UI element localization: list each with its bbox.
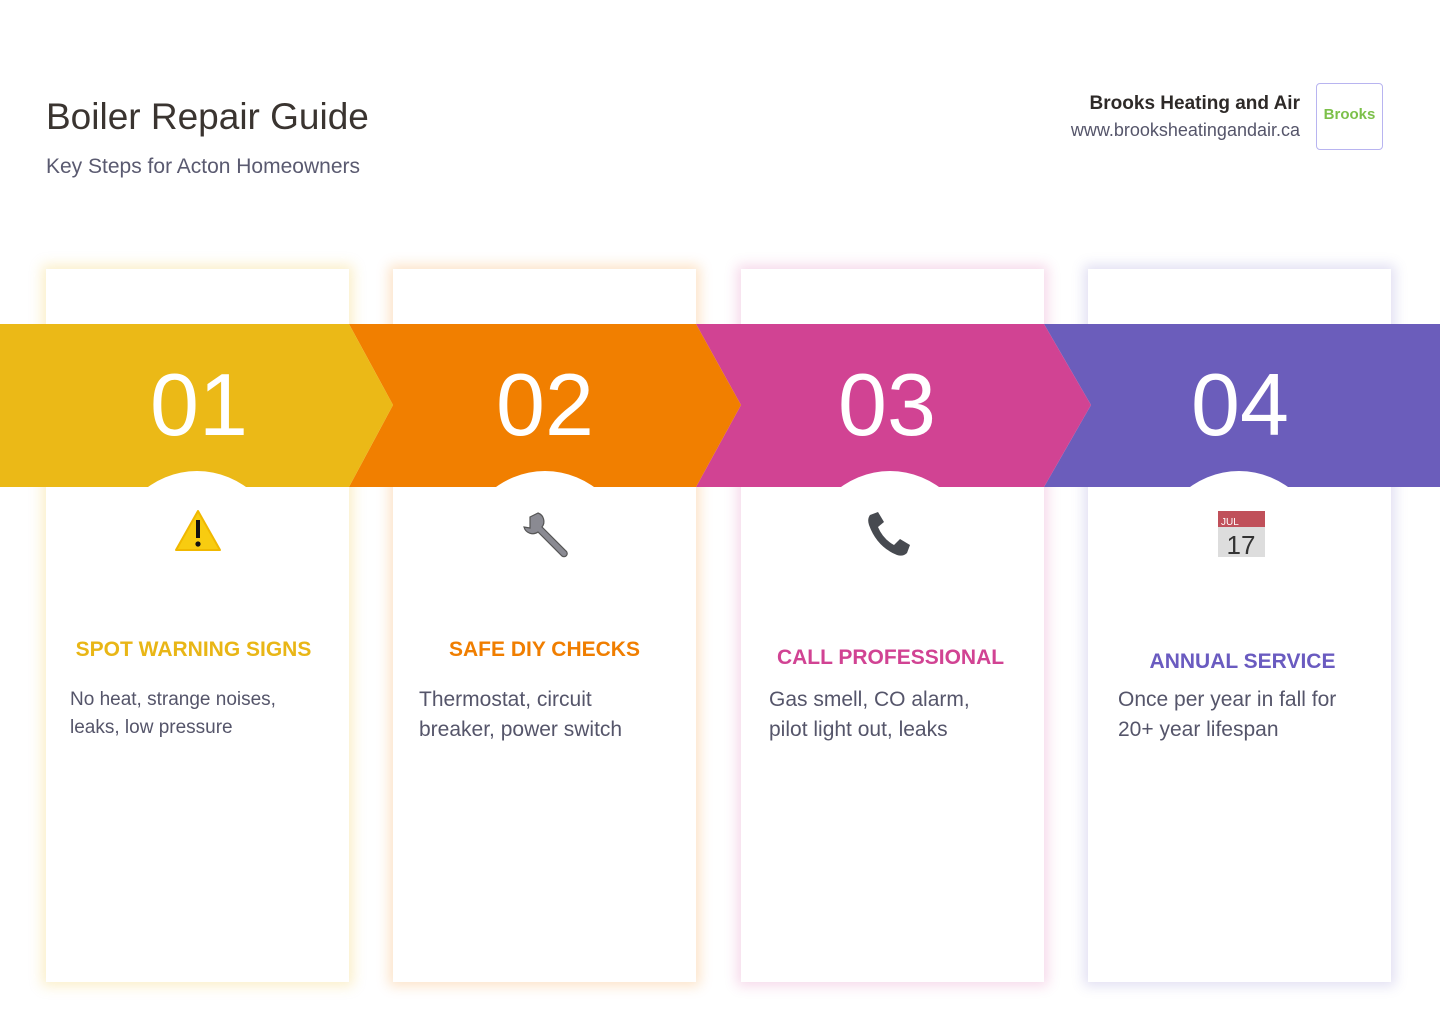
brand name: Brooks Heating and Air [1090, 93, 1300, 114]
text card 3 [769, 646, 1004, 741]
body 1: No heat, strange noises, [70, 689, 276, 710]
chevron band: 01 [150, 355, 248, 454]
card 2 [393, 269, 696, 982]
body 4: Once per year in fall for [1118, 688, 1336, 711]
logo: Brooks [1324, 106, 1375, 123]
chevron band: 02 [496, 355, 594, 454]
body 2: Thermostat, circuit [419, 688, 592, 711]
chevron band [0, 324, 1440, 487]
body 3: pilot light out, leaks [769, 718, 948, 741]
heading 4: ANNUAL SERVICE [1150, 650, 1335, 673]
icon: warning [175, 510, 221, 551]
body 4: 20+ year lifespan [1118, 718, 1279, 741]
heading 2: SAFE DIY CHECKS [449, 638, 640, 661]
subtitle: Key Steps for Acton Homeowners [46, 155, 360, 178]
body 1 [70, 689, 276, 738]
chevron band: 03 [838, 355, 936, 454]
text card 4 [1118, 650, 1336, 741]
icon: calendar: JUL [1221, 517, 1239, 528]
icon: phone [868, 512, 910, 556]
heading 3: CALL PROFESSIONAL [777, 646, 1004, 669]
text card 1 [70, 638, 311, 738]
logo [1316, 83, 1383, 150]
card 3 [741, 269, 1044, 982]
card 1 [46, 269, 349, 982]
body 3 [769, 688, 970, 741]
brand url: www.brooksheatingandair.ca [1071, 120, 1300, 140]
text card 2 [419, 638, 640, 741]
brand block [1070, 83, 1383, 150]
card 4 [1088, 269, 1391, 982]
chevron band: 04 [1191, 355, 1289, 454]
body 2: breaker, power switch [419, 718, 622, 741]
body 1: leaks, low pressure [70, 717, 233, 738]
title: Boiler Repair Guide [46, 96, 369, 137]
icon: wrench [523, 512, 568, 558]
body 2 [419, 688, 622, 741]
heading 1: SPOT WARNING SIGNS [76, 638, 311, 661]
body 3: Gas smell, CO alarm, [769, 688, 970, 711]
body 4 [1118, 688, 1336, 741]
icon: calendar [1218, 511, 1265, 559]
